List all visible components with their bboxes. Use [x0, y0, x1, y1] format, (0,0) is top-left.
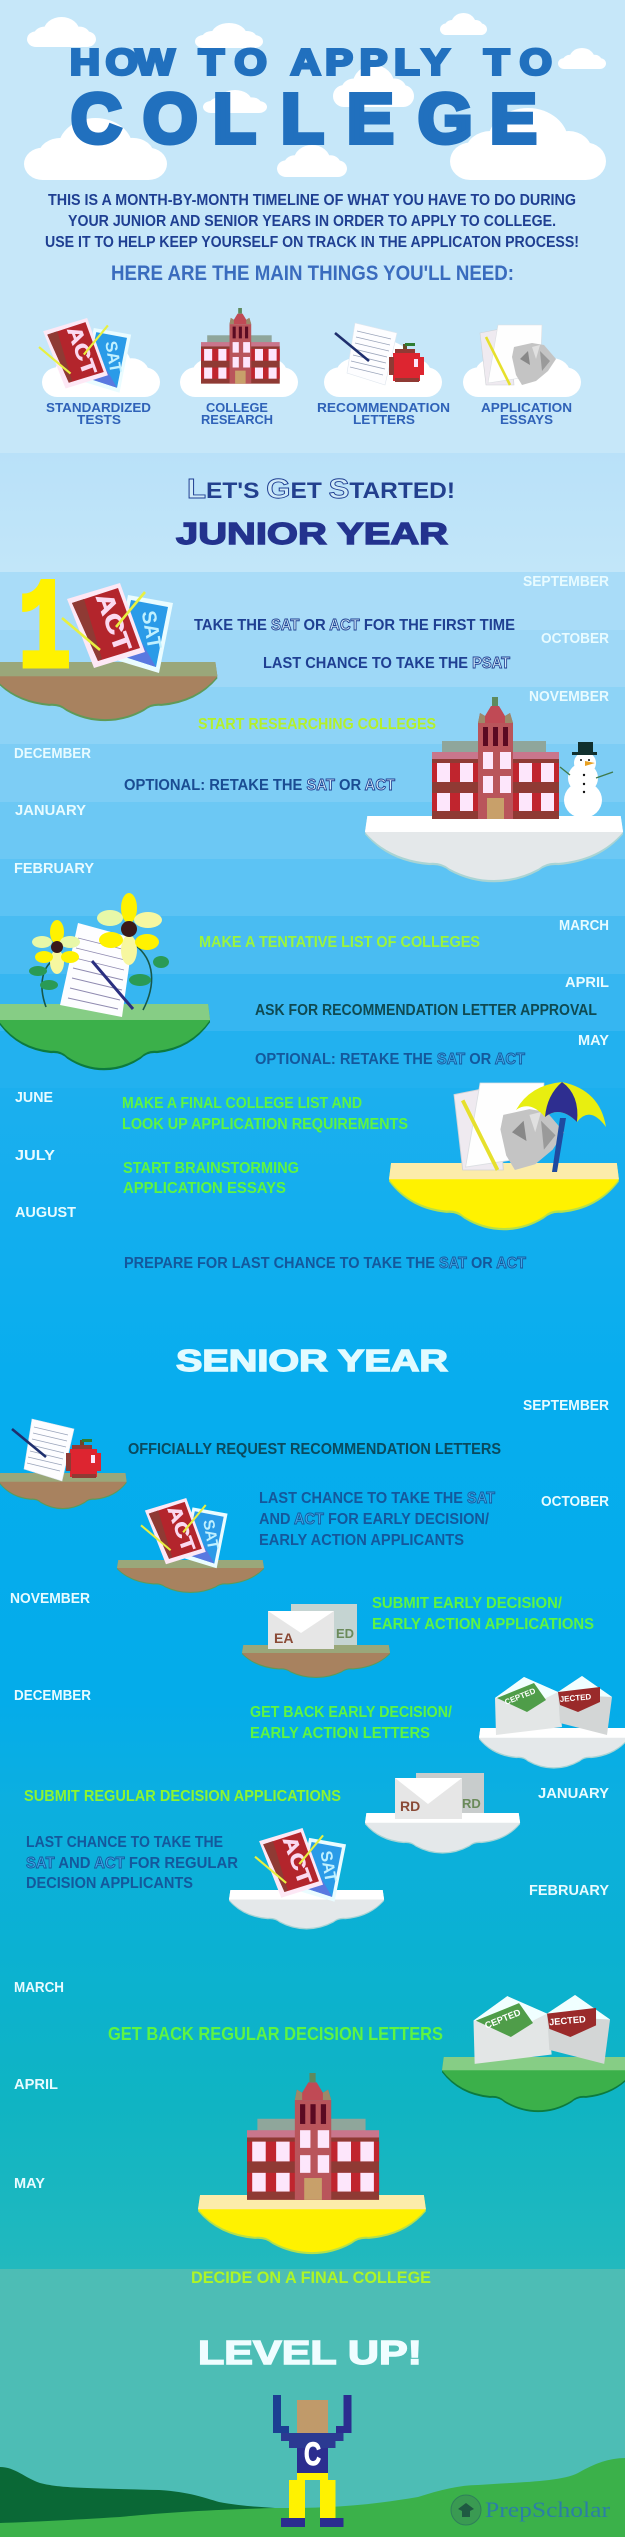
intro text: YOUR JUNIOR AND SENIOR YEARS IN ORDER TO APPLY TO COLLEGE. — [68, 213, 556, 230]
illustration: early action envelopes on small brown island — [242, 1604, 390, 1678]
months: junior year: MARCH — [559, 918, 609, 934]
tasks: junior year: LAST CHANCE TO TAKE THE PSAT — [263, 655, 510, 672]
illustration: college and snowman on white island — [365, 697, 623, 882]
illustration: ACT and SAT on white island — [229, 1828, 384, 1929]
label: recommendation letters — [317, 400, 450, 427]
icon: recommendation letters — [324, 323, 442, 397]
character: graduate cheering — [273, 2395, 352, 2527]
title: HOW TO APPLY TO — [70, 43, 552, 83]
tasks: senior year: DECISION APPLICANTS — [26, 1875, 193, 1892]
label: standardized tests: TESTS — [77, 412, 121, 427]
months: senior year: DECEMBER — [14, 1688, 91, 1704]
months: junior year: DECEMBER — [14, 746, 91, 762]
tasks: junior year: PREPARE FOR LAST CHANCE TO TAKE THE SAT OR ACT — [124, 1255, 526, 1272]
illustration: college on yellow island — [198, 2073, 426, 2254]
months: senior year: SEPTEMBER — [523, 1398, 609, 1414]
tasks: junior year: START RESEARCHING COLLEGES — [198, 716, 436, 733]
months: junior year: SEPTEMBER — [523, 574, 609, 590]
logo: PrepScholar — [451, 2495, 611, 2525]
label: recommendation letters: LETTERS — [353, 412, 415, 427]
months: senior year: MARCH — [14, 1980, 64, 1996]
illustration: number one with ACT and SAT on brown island — [0, 560, 217, 721]
ground hills — [0, 2458, 625, 2537]
tasks: junior year: START BRAINSTORMING — [123, 1160, 299, 1177]
intro text — [45, 192, 579, 251]
tasks: senior year: GET BACK REGULAR DECISION LETTERS — [108, 2024, 443, 2044]
logo: PrepScholar: PrepScholar — [485, 2497, 611, 2522]
months: senior year: JANUARY — [538, 1786, 609, 1802]
illustration: essays and umbrella on yellow island — [389, 1082, 619, 1230]
tasks: junior year: TAKE THE SAT OR ACT FOR THE FIRST TIME — [194, 617, 515, 634]
tasks: senior year: EARLY ACTION APPLICATIONS — [372, 1616, 594, 1633]
tasks: senior year: LAST CHANCE TO TAKE THE SAT — [259, 1490, 495, 1507]
tasks: senior year: OFFICIALLY REQUEST RECOMMENDATION LETTERS — [128, 1441, 501, 1458]
months: junior year: JULY — [15, 1148, 55, 1164]
tasks: senior year — [24, 1441, 594, 2287]
tasks: junior year: APPLICATION ESSAYS — [123, 1180, 286, 1197]
months: junior year: JUNE — [15, 1090, 53, 1106]
months: senior year: MAY — [14, 2176, 45, 2192]
label: standardized tests: STANDARDIZED — [46, 400, 151, 415]
tasks: senior year: EARLY ACTION APPLICANTS — [259, 1532, 464, 1549]
label: recommendation letters: RECOMMENDATION — [317, 400, 450, 415]
months: junior year: JANUARY — [15, 803, 86, 819]
tasks: junior year: LOOK UP APPLICATION REQUIREMENTS — [122, 1116, 408, 1133]
tasks: senior year: GET BACK EARLY DECISION/ — [250, 1704, 452, 1721]
months: senior year: NOVEMBER — [10, 1591, 90, 1607]
months: junior year: AUGUST — [15, 1205, 76, 1221]
label: college research — [201, 400, 273, 427]
tasks: senior year: SUBMIT REGULAR DECISION APPLICATIONS — [24, 1788, 341, 1805]
tasks: senior year: EARLY ACTION LETTERS — [250, 1725, 430, 1742]
tasks: senior year: SAT AND ACT FOR REGULAR — [26, 1855, 238, 1872]
illustration: accepted and rejected letters on green island — [442, 1995, 625, 2112]
illustration: number one with ACT and SAT on brown island: 1 — [18, 560, 71, 705]
tasks: senior year: LAST CHANCE TO TAKE THE — [26, 1834, 223, 1851]
months: junior year: OCTOBER — [541, 631, 609, 647]
illustration: letter and apple on small brown island — [0, 1419, 127, 1509]
illustration: flowers and letter on green island — [0, 893, 210, 1070]
label: standardized tests — [46, 400, 151, 427]
tasks: junior year: MAKE A TENTATIVE LIST OF COLLEGES — [199, 934, 480, 951]
heading: senior year: SENIOR YEAR — [176, 1343, 448, 1378]
illustration: accepted and rejected letters on white island — [479, 1676, 625, 1769]
label: application essays — [481, 400, 572, 427]
illustration: regular decision envelopes on white island: RD — [400, 1798, 420, 1814]
heading: level up: LEVEL UP! — [198, 2334, 422, 2371]
panel: main things icons — [39, 308, 581, 427]
title: COLLEGE — [71, 80, 537, 158]
tasks: junior year: OPTIONAL: RETAKE THE SAT OR ACT — [255, 1051, 525, 1068]
tasks: senior year: AND ACT FOR EARLY DECISION/ — [259, 1511, 489, 1528]
months: junior year: MAY — [578, 1033, 609, 1049]
months: junior year: NOVEMBER — [529, 689, 609, 705]
illustration: regular decision envelopes on white island — [365, 1773, 520, 1854]
months: senior year: FEBRUARY — [529, 1883, 609, 1899]
months: senior year: APRIL — [14, 2077, 58, 2093]
tasks: junior year: OPTIONAL: RETAKE THE SAT OR ACT — [124, 777, 395, 794]
months: senior year: OCTOBER — [541, 1494, 609, 1510]
months: junior year: APRIL — [565, 975, 609, 991]
label: college research: RESEARCH — [201, 412, 273, 427]
illustration: early action envelopes on small brown island: EA — [274, 1630, 293, 1646]
sky clouds — [24, 13, 606, 180]
label: college research: COLLEGE — [206, 400, 268, 415]
illustration: regular decision envelopes on white island: RD — [462, 1796, 481, 1811]
heading: let's get started: LET'S GET STARTED! — [187, 473, 455, 504]
months: senior year — [10, 1398, 609, 2192]
heading: main things: HERE ARE THE MAIN THINGS YOU'LL NEED: — [111, 262, 514, 285]
icon: standardized tests — [39, 318, 160, 397]
icon: college research — [180, 308, 298, 397]
icon: application essays — [463, 325, 581, 397]
tasks: senior year: DECIDE ON A FINAL COLLEGE — [191, 2268, 431, 2287]
illustration: ACT and SAT on small brown island — [117, 1498, 264, 1593]
title — [70, 43, 552, 157]
heading: junior year: JUNIOR YEAR — [176, 516, 448, 551]
intro text: THIS IS A MONTH-BY-MONTH TIMELINE OF WHAT YOU HAVE TO DO DURING — [48, 192, 576, 209]
label: application essays: APPLICATION — [481, 400, 572, 415]
months: junior year: FEBRUARY — [14, 861, 94, 877]
tasks: junior year — [122, 617, 597, 1272]
illustration: early action envelopes on small brown island: ED — [336, 1626, 354, 1641]
tasks: junior year: MAKE A FINAL COLLEGE LIST AND — [122, 1095, 362, 1112]
months: junior year — [14, 574, 609, 1221]
character: graduate cheering: C — [304, 2436, 321, 2472]
label: application essays: ESSAYS — [500, 412, 553, 427]
tasks: senior year: SUBMIT EARLY DECISION/ — [372, 1595, 563, 1612]
